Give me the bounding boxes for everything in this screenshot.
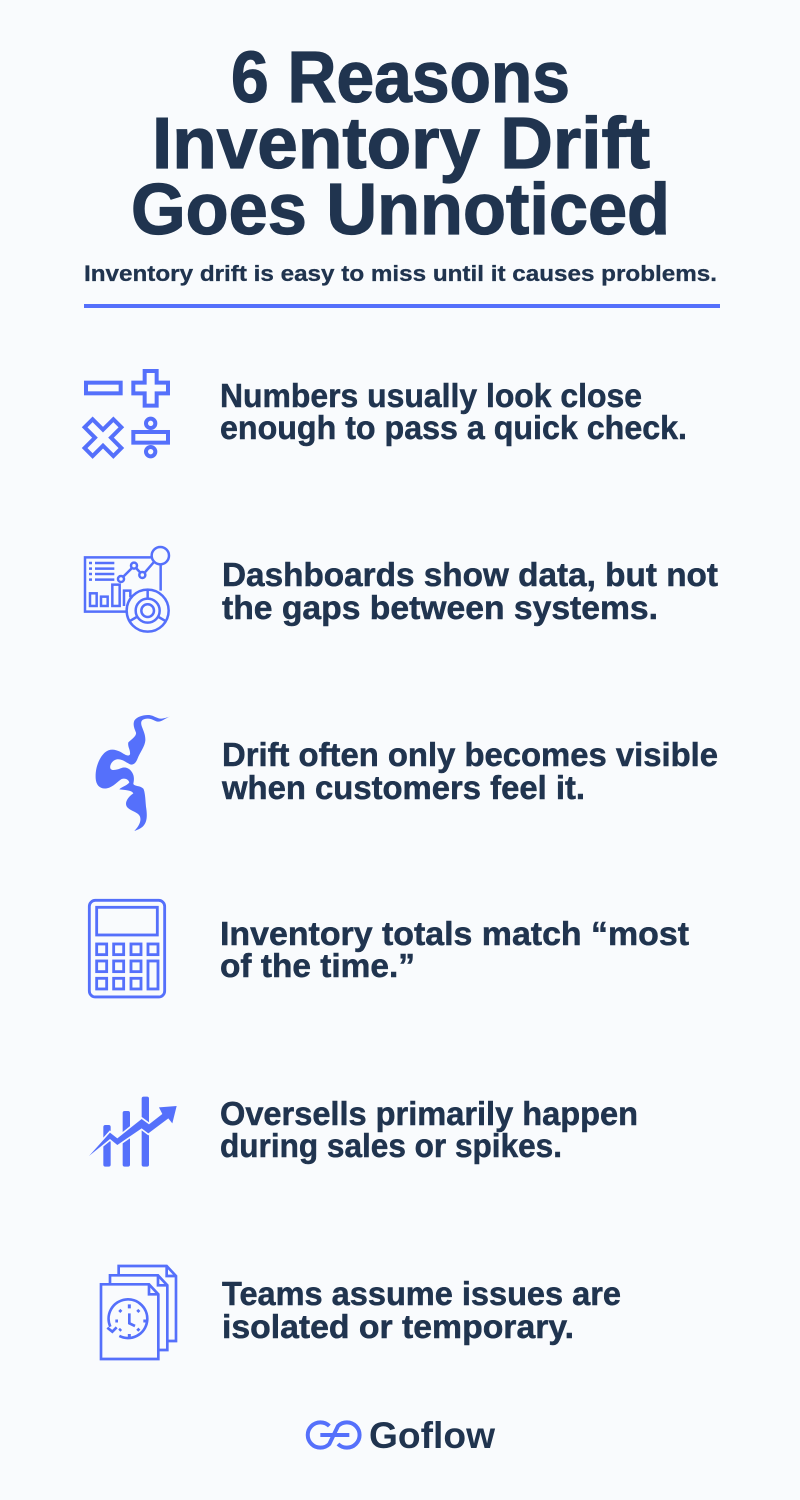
reason 5 text: Oversells primarily happen <box>220 1095 638 1132</box>
reason 4 text: Inventory totals match “most <box>220 915 689 952</box>
reason 4 text: of the time.” <box>220 947 415 984</box>
reason 4 <box>89 900 689 997</box>
reason 3 text <box>221 736 718 806</box>
subtitle: Inventory drift is easy to miss until it causes problems. <box>84 261 717 286</box>
icon: calculator <box>89 900 165 997</box>
reason 5 <box>89 1095 638 1167</box>
reason 4 text <box>220 915 689 984</box>
reason 6 text <box>222 1275 621 1345</box>
reason 1 <box>74 371 687 466</box>
reason 3 <box>96 715 718 831</box>
icon: documents with clock <box>101 1266 176 1359</box>
logo wordmark: Goflow <box>369 1415 495 1456</box>
reason 6 text: Teams assume issues are <box>222 1275 621 1312</box>
title: Goes Unnoticed <box>131 170 670 250</box>
icon: dashboard <box>85 547 169 632</box>
icon: math operators <box>74 371 168 466</box>
reason 2 <box>85 547 718 632</box>
title: 6 Reasons <box>231 38 570 118</box>
reason 1 text <box>220 377 687 446</box>
reason 2 text: Dashboards show data, but not <box>222 556 718 593</box>
reason 6 <box>101 1266 621 1359</box>
reason 2 text: the gaps between systems. <box>222 589 658 626</box>
icon: drifting river <box>96 715 170 831</box>
reason 3 text: Drift often only becomes visible <box>222 736 718 773</box>
reason 5 text: during sales or spikes. <box>220 1127 562 1164</box>
title <box>131 38 670 250</box>
icon: rising chart with arrow <box>89 1097 177 1167</box>
logo mark <box>308 1422 360 1448</box>
reason 1 text: Numbers usually look close <box>220 377 642 414</box>
Goflow logo <box>308 1415 495 1456</box>
title: Inventory Drift <box>152 104 650 184</box>
reason 3 text: when customers feel it. <box>221 769 585 806</box>
reason 1 text: enough to pass a quick check. <box>220 409 687 446</box>
reason 5 text <box>220 1095 638 1164</box>
reason 6 text: isolated or temporary. <box>222 1308 574 1345</box>
reason 2 text <box>222 556 718 626</box>
